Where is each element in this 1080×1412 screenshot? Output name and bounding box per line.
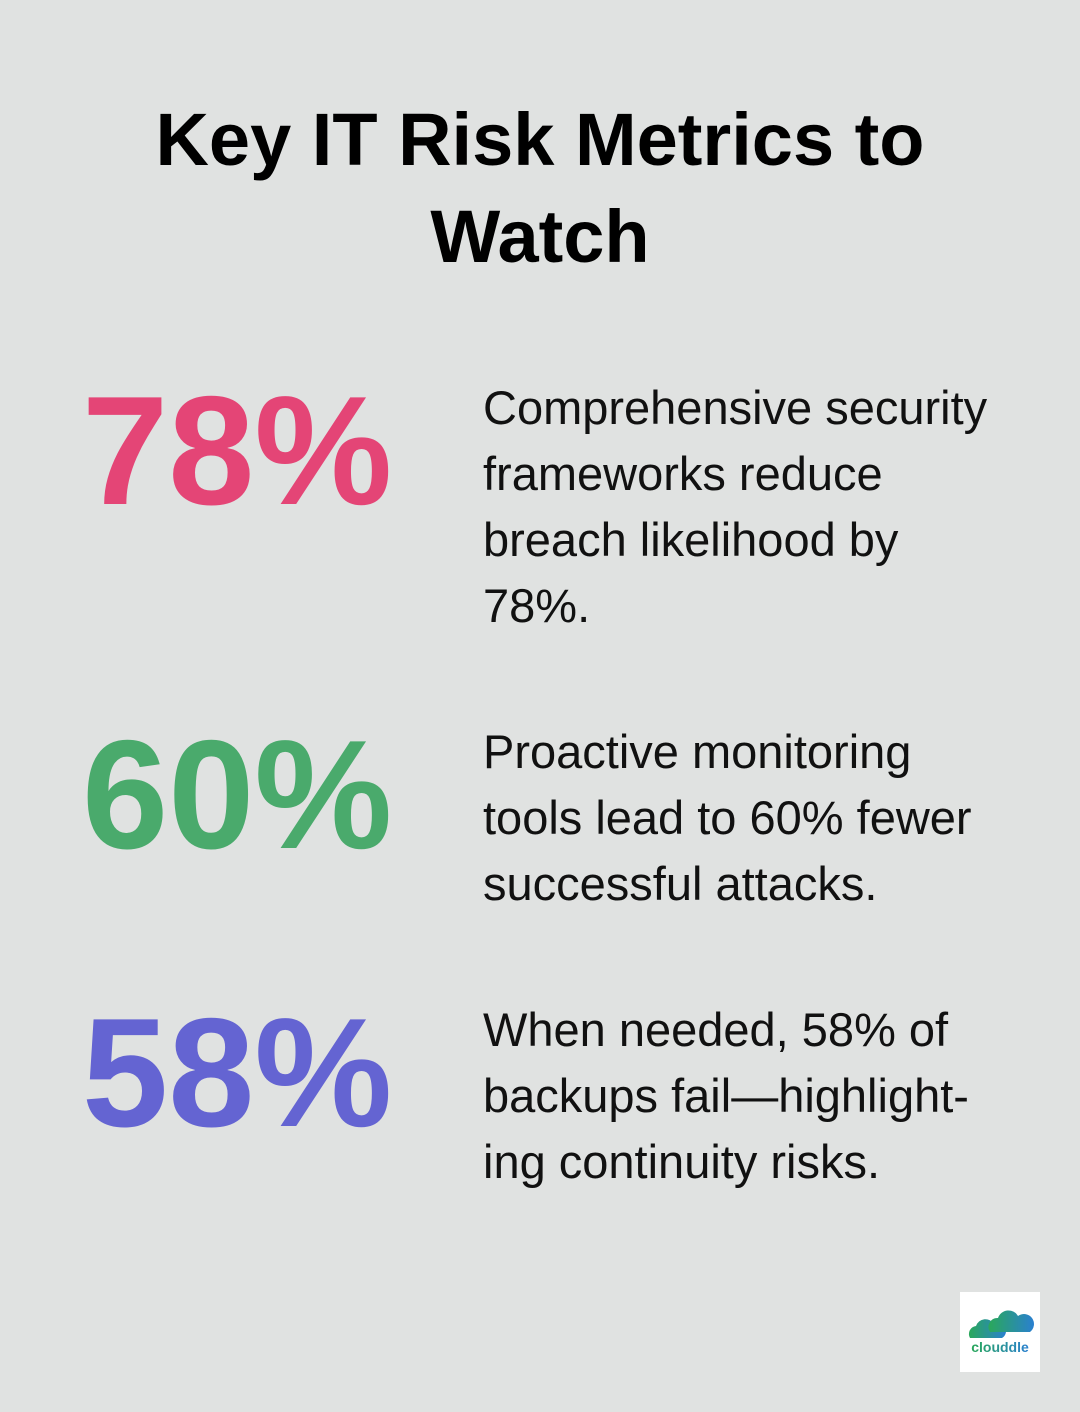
text 58%: backups fail—highlight-	[483, 1069, 969, 1122]
stat 78%: 78%	[82, 364, 392, 537]
logo: clouddle	[971, 1339, 1029, 1355]
text 78%: 78%.	[483, 579, 590, 632]
title: Watch	[430, 195, 650, 278]
stat 60%: 60%	[82, 708, 392, 881]
text 60%: tools lead to 60% fewer	[483, 791, 972, 844]
text 60%: successful attacks.	[483, 857, 877, 910]
text 58%: ing continuity risks.	[483, 1135, 880, 1188]
text 58%	[483, 1003, 969, 1188]
title	[155, 98, 924, 278]
text 58%: When needed, 58% of	[483, 1003, 948, 1056]
text 78%: frameworks reduce	[483, 447, 883, 500]
text 78%	[483, 381, 987, 632]
logo	[960, 1292, 1040, 1372]
text 60%: Proactive monitoring	[483, 725, 911, 778]
text 60%	[483, 725, 972, 910]
text 78%: Comprehensive security	[483, 381, 987, 434]
text 78%: breach likelihood by	[483, 513, 898, 566]
title: Key IT Risk Metrics to	[155, 98, 924, 181]
stat 58%: 58%	[82, 986, 392, 1159]
